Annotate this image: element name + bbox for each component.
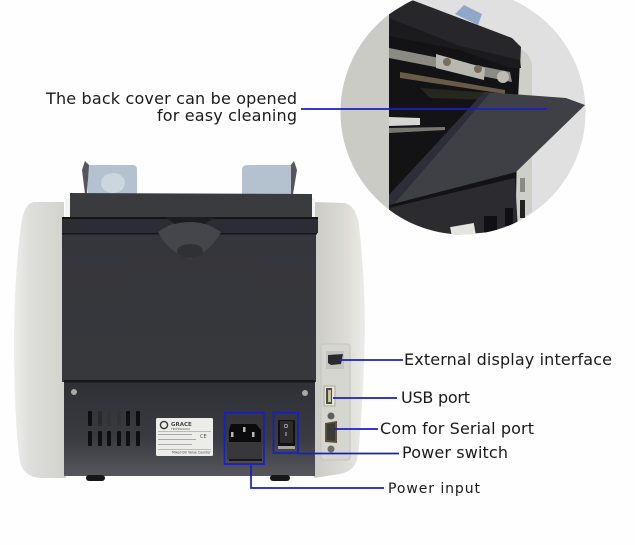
line: back cover [301,108,547,110]
inset photo: opened back cover [340,0,586,240]
left beige casing [14,202,66,478]
product label: Mixed bill Value Counter [172,450,211,454]
feet [86,475,105,481]
cover latch [158,220,221,259]
label: back cover: The back cover can be opened [45,89,297,108]
white gaps beside the top section [65,198,315,218]
left side of casing [340,14,389,210]
label: usb port: USB port [401,388,470,407]
metal roller shaft [389,48,512,82]
lower panel [64,382,315,476]
product label: TECHNOLOGY [170,427,191,431]
box and line: power input [224,412,384,488]
machine [14,161,365,481]
interior label [389,117,420,126]
power input socket [227,420,262,461]
lower back panel [389,178,518,240]
product label: CE [200,434,207,440]
small label [450,223,476,234]
left note guide [82,161,137,194]
box and line: power switch [274,412,399,454]
back cover band [62,217,318,233]
label: power input: Power input [388,481,480,497]
label: power switch: Power switch [402,443,508,462]
line: usb [333,397,397,399]
blue callout lines [224,109,547,488]
machine interior [389,18,520,215]
product label [156,418,213,456]
product label: GRACE [171,422,192,428]
line: external display [340,359,403,361]
right side of casing [515,48,532,222]
ventilation slots [88,411,140,446]
back cover [62,233,316,382]
label: back cover: for easy cleaning [157,106,297,125]
top section [70,193,312,217]
external display port [326,351,344,369]
blue note guide [455,5,482,25]
top cover [389,0,521,68]
label: com for serial port: Com for Serial port [380,419,534,438]
right beige casing [314,202,365,478]
label: back cover [45,89,297,125]
right note guide [242,161,297,194]
screws [71,389,77,395]
label: external display interface: External display interface [404,350,612,369]
line: serial [335,428,378,430]
serial port [325,412,337,452]
port inset plate [321,344,350,460]
usb port [324,386,335,406]
power switch [278,420,295,449]
open cover flap [389,92,585,205]
